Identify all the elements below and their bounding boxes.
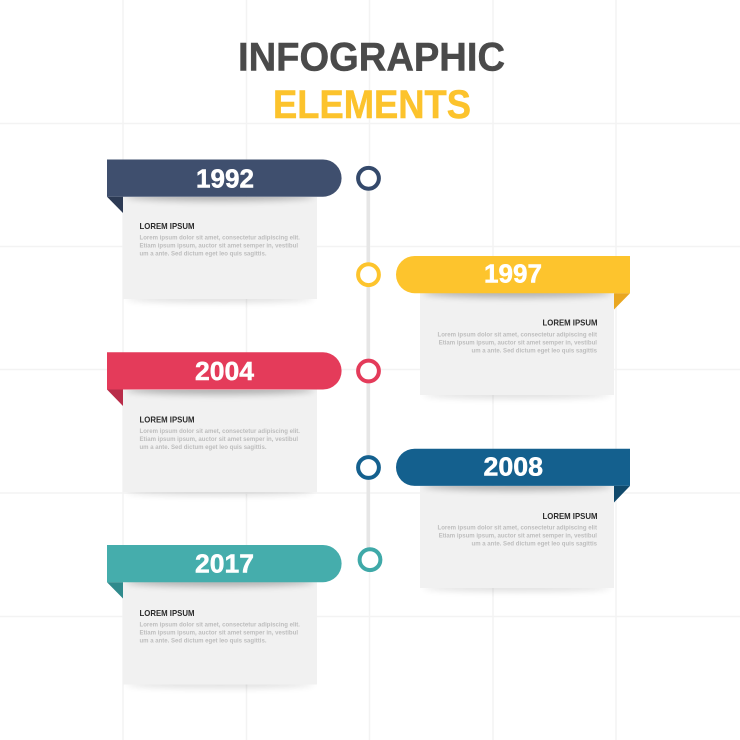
fold: [614, 486, 630, 502]
card: [123, 390, 317, 492]
fold: [107, 197, 123, 213]
timeline marker: 1997: [358, 264, 379, 285]
body text: Lorem ipsum dolor sit amet, consectetur adipiscing elit: [438, 331, 598, 338]
body text: Etiam ipsum ipsum, auctor sit amet semper in, vestibul: [140, 629, 298, 636]
card: [123, 582, 317, 684]
panel: 1997: [396, 256, 630, 398]
heading: LOREM IPSUM: [140, 221, 194, 231]
banner: [107, 352, 342, 390]
body text: um a ante. Sed dictum eget leo quis sagittis.: [140, 637, 267, 644]
fold: [107, 390, 123, 406]
heading: LOREM IPSUM: [140, 414, 194, 424]
body text: [438, 331, 598, 354]
body text: [140, 621, 300, 644]
year: 2004: [195, 356, 255, 386]
timeline marker: 2008: [358, 457, 379, 478]
heading: LOREM IPSUM: [542, 318, 598, 328]
card: [123, 197, 317, 299]
fold: [107, 582, 123, 598]
title: [238, 36, 505, 127]
body text: Lorem ipsum dolor sit amet, consectetur adipiscing elit.: [140, 428, 300, 435]
fold: [614, 293, 630, 310]
year: 2017: [195, 549, 254, 579]
panel: 1992: [107, 160, 342, 302]
body text: Etiam ipsum ipsum, auctor sit amet semper in, vestibul: [140, 242, 298, 250]
body text: Lorem ipsum dolor sit amet, consectetur adipiscing elit: [438, 524, 598, 531]
banner: [107, 160, 342, 197]
timeline marker: 1992: [358, 168, 379, 189]
body text: um a ante. Sed dictum eget leo quis sagittis.: [140, 250, 267, 258]
timeline axis: [366, 190, 370, 550]
heading: LOREM IPSUM: [542, 511, 598, 521]
body text: Etiam ipsum ipsum, auctor sit amet semper in, vestibul: [140, 436, 298, 443]
timeline marker: 2017: [360, 549, 380, 570]
panel: 2017: [107, 545, 342, 688]
banner: [396, 449, 630, 486]
panel: 2008: [396, 449, 630, 592]
body text: Lorem ipsum dolor sit amet, consectetur adipiscing elit.: [140, 621, 300, 628]
body text: Lorem ipsum dolor sit amet, consectetur adipiscing elit.: [140, 234, 300, 242]
body text: [438, 524, 598, 547]
body text: um a ante. Sed dictum eget leo quis sagittis.: [140, 444, 267, 451]
year: 2008: [484, 451, 543, 481]
year: 1992: [196, 163, 254, 193]
body text: um a ante. Sed dictum eget leo quis sagittis: [472, 347, 597, 354]
title: ELEMENTS: [273, 83, 471, 127]
title: INFOGRAPHIC: [238, 36, 505, 80]
year: 1997: [484, 259, 542, 289]
card: [420, 293, 614, 395]
body text: Etiam ipsum ipsum, auctor sit amet semper in, vestibul: [439, 532, 597, 539]
body text: [140, 234, 300, 258]
timeline marker: 2004: [358, 361, 379, 381]
body text: um a ante. Sed dictum eget leo quis sagittis: [472, 540, 597, 547]
panel: 2004: [107, 352, 342, 496]
card: [420, 486, 614, 588]
body text: Etiam ipsum ipsum, auctor sit amet semper in, vestibul: [439, 339, 597, 346]
body text: [140, 428, 300, 451]
banner: [107, 545, 342, 582]
heading: LOREM IPSUM: [140, 608, 194, 618]
banner: [396, 256, 630, 293]
